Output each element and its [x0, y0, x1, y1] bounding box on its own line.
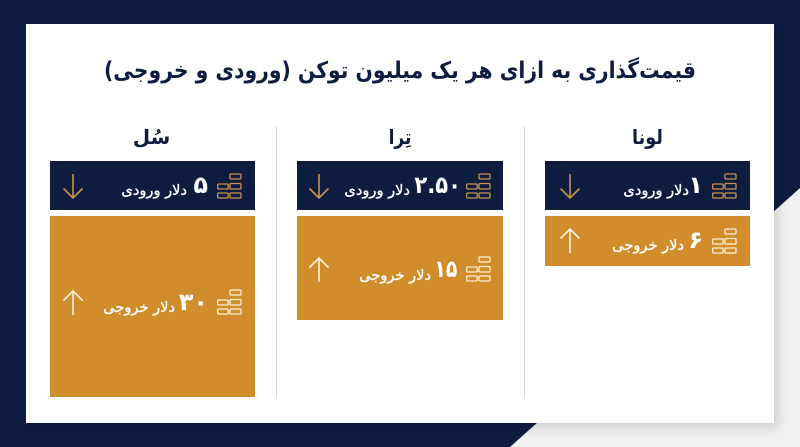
icon: token stack	[466, 173, 491, 199]
label: دلار ورودی	[344, 182, 410, 199]
panel: Luna output	[545, 216, 750, 266]
panel: Sol output	[50, 216, 255, 397]
arrow: up	[63, 290, 83, 315]
arrow: down	[560, 174, 580, 199]
panel: Terra input	[297, 161, 503, 210]
value: ۲.۵۰	[414, 171, 461, 199]
icon: token stack	[712, 228, 737, 254]
arrow: down	[309, 174, 329, 199]
value: ۶	[688, 226, 703, 254]
panel: Terra output	[297, 216, 503, 320]
icon: token stack	[712, 173, 737, 199]
panel: Sol input	[50, 161, 255, 210]
icon: token stack	[466, 256, 491, 282]
heading: Sol: سُل	[133, 125, 170, 149]
value: ۳۰	[179, 288, 208, 316]
label: دلار خروجی	[359, 267, 431, 284]
icon: token stack	[217, 173, 242, 199]
arrow: up	[560, 228, 580, 253]
value: ۱	[688, 171, 703, 199]
title: قیمت‌گذاری به ازای هر یک میلیون توکن (ورودی و خروجی)	[104, 58, 696, 84]
heading: Luna: لونا	[632, 125, 663, 149]
arrow: up	[309, 257, 329, 282]
heading: Terra: تِرا	[389, 125, 411, 149]
label: دلار ورودی	[623, 182, 689, 199]
label: دلار خروجی	[612, 237, 684, 254]
value: ۱۵	[434, 255, 457, 283]
label: دلار ورودی	[121, 182, 187, 199]
arrow: down	[63, 174, 83, 199]
value: ۵	[193, 171, 208, 199]
icon: token stack	[217, 289, 242, 315]
label: دلار خروجی	[103, 299, 175, 316]
panel: Luna input	[545, 161, 750, 210]
